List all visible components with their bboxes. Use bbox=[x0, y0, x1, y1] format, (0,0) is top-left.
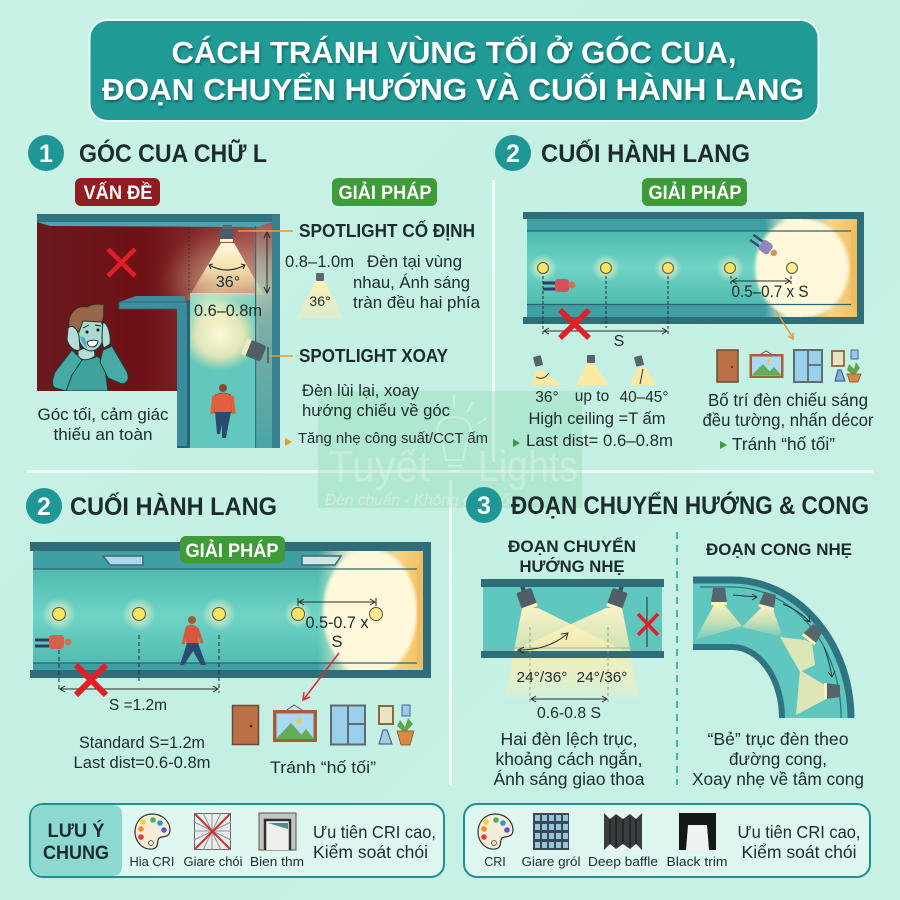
rotating spotlight lamp bbox=[241, 338, 267, 362]
subheading: đoạn cong nhẹ: ĐOẠN CONG NHẸ bbox=[706, 541, 852, 559]
icon captions: Deep baffle bbox=[588, 855, 658, 869]
caption: góc tối bbox=[38, 405, 169, 444]
beam labels: 36° bbox=[535, 389, 559, 406]
section number 2 bbox=[26, 488, 62, 524]
ceiling lamps bbox=[529, 254, 798, 282]
spacing dimension bbox=[59, 598, 376, 693]
text: ưu tiên: Kiểm soát chói bbox=[742, 842, 856, 862]
label: giải pháp bbox=[642, 178, 747, 206]
section number 3 bbox=[466, 487, 502, 523]
side wall panel bbox=[256, 226, 272, 448]
person top view bbox=[748, 232, 780, 260]
red X bbox=[638, 614, 658, 635]
section number 2 bbox=[495, 135, 531, 171]
text: bẻ trục đèn: đường cong, bbox=[729, 749, 827, 769]
text: spotlight cố định: nhau, Ánh sáng bbox=[353, 273, 470, 292]
panel: 2 cuối hành lang bottom bbox=[26, 488, 431, 777]
red X bbox=[76, 665, 106, 695]
panel: 3 đoạn chuyển hướng và cong bbox=[466, 487, 869, 789]
panel box bbox=[464, 804, 870, 877]
dimensions bbox=[518, 597, 647, 704]
hair bbox=[69, 304, 104, 332]
panel box bbox=[30, 804, 444, 877]
dashed divider bbox=[676, 532, 678, 785]
label: 0.5-0.7 x S: S bbox=[331, 633, 343, 651]
icon: window bbox=[331, 705, 365, 745]
label: vấn đề: VẤN ĐỀ bbox=[84, 182, 152, 204]
label: giải pháp: GIẢI PHÁP bbox=[338, 182, 432, 204]
walls bbox=[523, 212, 864, 324]
red X bbox=[560, 310, 589, 338]
title banner: ĐOẠN CHUYỂN HƯỚNG VÀ CUỐI HÀNH LANG bbox=[102, 71, 804, 107]
person lying bbox=[543, 279, 576, 292]
text: hai đèn lệch trục: khoảng cách ngắn, bbox=[496, 748, 642, 769]
beam labels: High ceiling =T ấm bbox=[528, 410, 666, 428]
beam labels bbox=[516, 669, 628, 686]
connector lines bbox=[238, 231, 293, 363]
text: bẻ trục đèn bbox=[692, 729, 864, 789]
last distance note: Last dist= 0.6–0.8m bbox=[526, 432, 673, 450]
text: ưu tiên bbox=[738, 822, 860, 862]
red arrow to decor bbox=[303, 653, 339, 700]
subheading: đoạn chuyển hướng nhẹ bbox=[508, 537, 636, 576]
dimension lines bbox=[189, 228, 270, 293]
title banner bbox=[90, 20, 818, 121]
label: lưu ý chung: LƯU Ý bbox=[48, 818, 104, 842]
text: standard S: Standard S=1.2m bbox=[79, 734, 205, 752]
text: standard S bbox=[74, 734, 210, 772]
label: giải pháp: GIẢI PHÁP bbox=[648, 182, 742, 204]
label: 0.5-0.7 x S: 0.5-0.7 x bbox=[306, 614, 369, 632]
section number 2: 2 bbox=[37, 493, 51, 521]
icon: picture bbox=[750, 351, 784, 378]
heading: góc cua chữ L: GÓC CUA CHỮ L bbox=[79, 138, 267, 168]
note: tăng công suất: Tăng nhẹ công suất/CCT ấm bbox=[298, 431, 488, 447]
corridor floor bbox=[483, 587, 662, 651]
text: hai đèn lệch trục: Ánh sáng giao thoa bbox=[494, 769, 645, 789]
left sleeve bbox=[52, 350, 82, 391]
walls bbox=[30, 542, 431, 678]
text: spotlight cố định: Đèn tại vùng bbox=[367, 252, 462, 271]
mouth bbox=[87, 340, 98, 347]
right sleeve bbox=[100, 346, 128, 384]
walls bbox=[37, 214, 280, 448]
label: lưu ý chung bbox=[31, 805, 122, 876]
text: ưu tiên: Ưu tiên CRI cao, bbox=[738, 822, 860, 842]
icon: mini spotlight 36°: 36° bbox=[309, 293, 331, 309]
corridor plan bbox=[30, 536, 431, 714]
caption: góc tối: Góc tối, cảm giác bbox=[38, 405, 169, 424]
icon captions: CRI bbox=[484, 855, 506, 869]
icon captions bbox=[484, 855, 728, 869]
diagram: gentle curve bbox=[693, 580, 851, 718]
person lying bbox=[35, 635, 72, 649]
neck and collar bbox=[78, 346, 95, 360]
text: spotlight xoay bbox=[302, 381, 450, 420]
icon: decor bbox=[379, 705, 414, 745]
text: spotlight xoay: hướng chiếu về góc bbox=[302, 401, 450, 420]
label: spotlight cố định: SPOTLIGHT CỐ ĐỊNH bbox=[299, 220, 475, 241]
label: 0.5-0.7 x S bbox=[306, 614, 369, 651]
label: S: S bbox=[614, 333, 624, 350]
panel: lưu ý chung bbox=[30, 804, 444, 877]
arrow to decor bbox=[776, 311, 793, 339]
icon: window bbox=[794, 350, 822, 382]
icon: door bbox=[232, 706, 258, 744]
label: S=1.2m: S =1.2m bbox=[109, 697, 167, 714]
icon: door bbox=[717, 350, 738, 382]
subheading: đoạn chuyển hướng nhẹ: ĐOẠN CHUYỂN bbox=[508, 537, 636, 556]
curved floor bbox=[693, 582, 848, 718]
corridor floor bbox=[190, 293, 256, 448]
icon: deep baffle bbox=[604, 813, 642, 850]
section number 2: 2 bbox=[506, 140, 520, 168]
label: spotlight xoay: SPOTLIGHT XOAY bbox=[299, 346, 448, 366]
heading: cuối hành lang: CUỐI HÀNH LANG bbox=[70, 491, 277, 521]
face bbox=[78, 322, 102, 352]
red X bbox=[108, 249, 135, 276]
fixed spotlight lamp bbox=[220, 225, 233, 242]
text: spotlight cố định: 0.8–1.0m bbox=[285, 252, 354, 271]
walker bbox=[212, 384, 234, 438]
label: spacing: 0.6-0.8 S bbox=[537, 705, 601, 722]
text: standard S: Last dist=0.6-0.8m bbox=[74, 754, 210, 772]
skylights bbox=[103, 556, 341, 565]
text: bố trí đèn bbox=[702, 390, 874, 430]
brows bbox=[83, 325, 101, 328]
person afraid bbox=[52, 304, 128, 391]
icon captions bbox=[130, 855, 304, 869]
label: lưu ý chung: CHUNG bbox=[43, 842, 109, 864]
icon: grille bbox=[533, 813, 569, 850]
icon captions: Bien thm bbox=[250, 855, 304, 869]
person walking bbox=[180, 616, 206, 665]
corridor floor and glow bbox=[527, 218, 857, 318]
text: ưu tiên bbox=[313, 822, 436, 862]
text: hai đèn lệch trục: Hai đèn lệch trục, bbox=[500, 729, 638, 749]
dark corner area bbox=[37, 222, 272, 391]
watermark: Đèn chuẩn - Không gian tốt bbox=[325, 492, 514, 509]
watermark: Tuyết bbox=[328, 442, 430, 491]
label: giải pháp bbox=[332, 178, 437, 206]
tear shadow bbox=[80, 336, 87, 348]
text: bẻ trục đèn: Xoay nhẹ về tâm cong bbox=[692, 769, 864, 789]
beam labels: 40–45° bbox=[620, 389, 668, 406]
icon: picture bbox=[273, 705, 317, 742]
title banner: CÁCH TRÁNH VÙNG TỐI Ở GÓC CUA, bbox=[172, 34, 736, 70]
icon: glare grille bbox=[194, 813, 231, 850]
section number 1 bbox=[28, 135, 64, 171]
spotlights bbox=[711, 588, 840, 699]
corridor floor and glow bbox=[33, 548, 423, 676]
icon: palette bbox=[478, 814, 513, 849]
text: ưu tiên: Kiểm soát chói bbox=[313, 842, 428, 862]
white dividers bbox=[27, 180, 873, 785]
eyes bbox=[86, 328, 100, 334]
caption: góc tối: thiếu an toàn bbox=[54, 425, 152, 444]
text: spotlight xoay: Đèn lùi lại, xoay bbox=[302, 381, 419, 400]
icon captions: Giare chói bbox=[184, 855, 242, 869]
text: bẻ trục đèn: “Bẻ” trục đèn theo bbox=[708, 729, 848, 749]
note: tránh hố tối: Tránh “hố tối” bbox=[732, 434, 835, 454]
spacing dimension bbox=[543, 276, 791, 334]
walls bbox=[481, 579, 664, 658]
icon: decor bbox=[832, 350, 861, 382]
heading: cuối hành lang: CUỐI HÀNH LANG bbox=[541, 138, 750, 168]
diagram: slight turn bbox=[481, 579, 664, 722]
text: tránh hố tối: Tránh “hố tối” bbox=[270, 758, 376, 777]
corridor plan bbox=[523, 212, 864, 350]
ceiling lamps bbox=[42, 597, 382, 631]
direction arrows bbox=[733, 594, 835, 677]
label: 0.5–0.7 x S: 0.5–0.7 x S bbox=[732, 283, 808, 301]
light cones bbox=[505, 608, 640, 698]
curved walls bbox=[693, 580, 851, 718]
left hand bbox=[67, 326, 80, 350]
beam labels: up to bbox=[575, 388, 609, 405]
text: spotlight cố định: tràn đều hai phía bbox=[353, 293, 481, 312]
text: bố trí đèn: đều tường, nhấn décor bbox=[702, 410, 874, 430]
spotlights bbox=[515, 584, 629, 611]
beam labels bbox=[528, 388, 668, 428]
panel: 2 cuối hành lang top bbox=[495, 135, 874, 454]
light cones bbox=[695, 603, 828, 715]
panel: glare control bbox=[464, 804, 870, 877]
text: spotlight cố định bbox=[285, 252, 481, 312]
torso bbox=[64, 356, 108, 391]
text: ưu tiên: Ưu tiên CRI cao, bbox=[313, 822, 436, 842]
icon: black trim bbox=[679, 813, 716, 850]
icon captions: Black trim bbox=[666, 855, 728, 869]
floor plan: L corner bbox=[37, 214, 292, 448]
icon: mini spotlight 36° bbox=[296, 273, 344, 318]
label: giải pháp: GIẢI PHÁP bbox=[186, 540, 279, 562]
icon captions: Giare gról bbox=[522, 855, 580, 869]
cone angle: 36° bbox=[216, 274, 240, 291]
right hand bbox=[102, 322, 110, 348]
heading: đoạn chuyển hướng và cong: ĐOẠN CHUYỂN HƯỚNG & CONG bbox=[511, 490, 869, 520]
watermark bbox=[318, 391, 582, 509]
text: hai đèn lệch trục bbox=[494, 729, 645, 789]
label: vấn đề bbox=[75, 178, 160, 206]
mini beam icons bbox=[531, 355, 656, 385]
light from fixed spotlight bbox=[160, 230, 292, 330]
section number 1: 1 bbox=[39, 140, 53, 168]
icon: palette bbox=[135, 814, 170, 849]
icon: dark edge door bbox=[259, 813, 296, 850]
subheading: đoạn chuyển hướng nhẹ: HƯỚNG NHẸ bbox=[520, 557, 624, 576]
watermark: Lights bbox=[478, 442, 578, 491]
beam labels: 24°/36° bbox=[576, 669, 628, 686]
light from rotating spotlight bbox=[180, 284, 260, 371]
text: bố trí đèn: Bố trí đèn chiếu sáng bbox=[708, 390, 868, 410]
panel: 1 góc cua chữ L bbox=[28, 135, 488, 448]
icon captions: Hia CRI bbox=[130, 855, 174, 869]
section number 3: 3 bbox=[477, 492, 491, 520]
beam labels: 24°/36° bbox=[516, 669, 568, 686]
dimension text: 0.6–0.8m bbox=[194, 301, 262, 320]
